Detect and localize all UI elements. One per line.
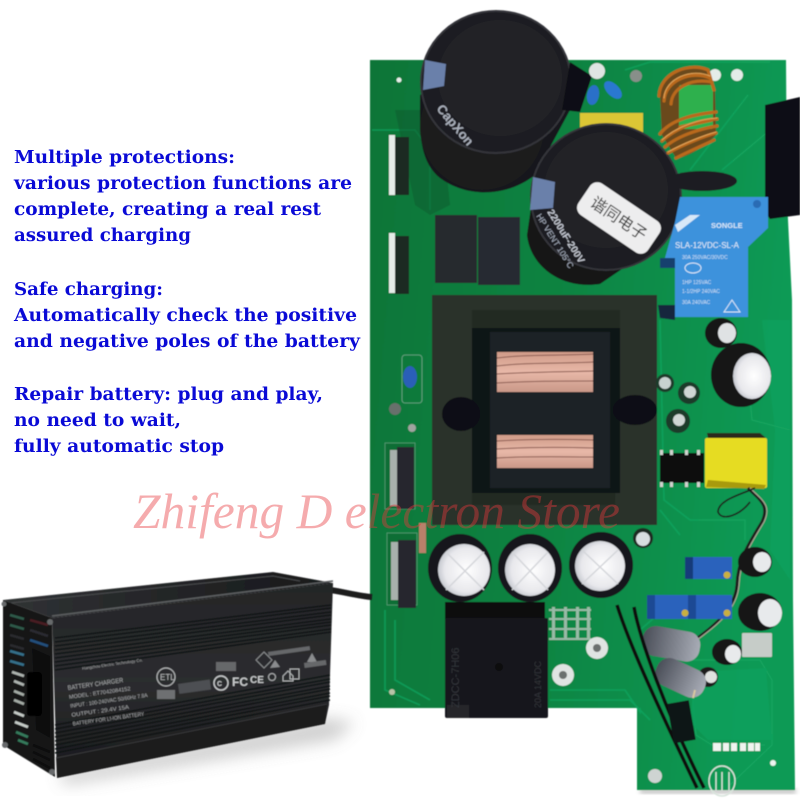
heading: repair battery: fully automatic stop — [14, 437, 224, 457]
copper pour — [690, 668, 772, 740]
capacitor top — [531, 124, 681, 270]
charger drop shadow — [58, 718, 355, 785]
copper winding lower — [497, 435, 593, 468]
relay brand: SONGLE — [711, 221, 743, 230]
ETL mark: ETL — [160, 673, 175, 682]
bottom right components — [667, 700, 760, 796]
capacitor body — [527, 130, 680, 285]
product title: BATTERY CHARGER — [67, 677, 124, 692]
black relay — [445, 602, 548, 718]
heading: safe charging: Safe charging: — [14, 280, 163, 300]
output: OUTPUT : 29.4V 15A — [71, 705, 130, 719]
heading: safe charging: and negative poles of the battery — [14, 332, 361, 352]
watermark: store name: Zhifeng D electron Store — [133, 483, 620, 539]
large capacitor: 2200uF 200V — [527, 124, 681, 285]
capacitor body — [420, 60, 570, 192]
label: CapXon: CapXon — [434, 101, 477, 149]
charger end panel — [3, 600, 55, 777]
heading: multiple protections: assured charging — [14, 226, 191, 246]
power cable — [330, 590, 372, 597]
relay ratings: 30A 240VAC — [682, 300, 711, 306]
blue trimmers — [647, 557, 732, 619]
SMD cluster — [549, 607, 591, 640]
battery type: BATTERY FOR LI-ION BATTERY — [72, 712, 145, 728]
IEC power socket — [32, 648, 50, 738]
heading: safe charging: Automatically check the positive — [13, 306, 357, 326]
mounting screws — [389, 637, 776, 783]
brand line: Hangzhou Electric Technology Co. — [82, 657, 143, 671]
yellow auxiliary transformer — [705, 433, 767, 489]
certification marks: CE — [250, 675, 264, 686]
right side capacitors — [656, 318, 771, 433]
upper cooling ribs — [55, 605, 331, 670]
charger bottom skirt — [56, 703, 327, 778]
black output wires — [617, 605, 704, 788]
pair of MOSFET heat tabs, top left — [389, 135, 409, 294]
white label — [574, 179, 664, 257]
relay ratings — [682, 255, 728, 306]
large capacitor: CapXon — [420, 11, 592, 192]
white connector — [742, 633, 772, 657]
relay ratings: 1HP 125VAC — [682, 280, 712, 286]
heading: multiple protections: various protection functions are — [13, 174, 352, 194]
capacitor top — [421, 11, 571, 153]
text block: product benefits — [13, 148, 361, 457]
input: INPUT : 100-240VAC 50/60Hz 7.8A — [70, 693, 148, 710]
voltage rating text: 2200uF-200V — [544, 208, 586, 266]
small blue capacitors — [396, 63, 743, 106]
heading: multiple protections: complete, creating a real rest — [14, 200, 321, 220]
heading: repair battery — [14, 385, 323, 457]
vent spec text: HP VENT 105°C — [534, 212, 576, 270]
heading: safe charging — [13, 280, 361, 352]
heading: repair battery: Repair battery: plug and play, — [14, 385, 323, 405]
vent tab — [530, 177, 555, 210]
relay print: ZDCC-7H06 — [450, 647, 462, 708]
copper traces — [372, 62, 790, 785]
blue relay — [658, 197, 768, 320]
small lower right capacitors — [698, 547, 782, 687]
heading: multiple protections — [13, 148, 352, 246]
yellow film capacitor — [580, 113, 643, 133]
charger long face — [52, 583, 333, 778]
toroid inductor — [659, 66, 717, 158]
charger top face — [3, 572, 333, 618]
certification marks: FC — [232, 675, 248, 689]
black capacitor foot — [667, 171, 737, 191]
relay ratings: 30A 250VAC/30VDC — [682, 255, 728, 261]
heading: multiple protections: Multiple protections: — [14, 148, 235, 168]
white label: 谐同电子 — [587, 193, 650, 244]
grey transformer leads — [695, 488, 767, 640]
lower left MOSFETs — [385, 443, 426, 608]
X2 box capacitors — [435, 215, 520, 285]
panel: battery charger photo — [2, 572, 372, 785]
relay ratings: 1-1/2HP 240VAC — [682, 289, 720, 295]
lower cooling ribs — [55, 675, 330, 753]
black fan connector — [765, 97, 800, 219]
switching IC — [660, 450, 704, 487]
relay model: SLA-12VDC-SL-A — [675, 241, 740, 250]
certification marks — [178, 646, 326, 694]
vent tab — [423, 60, 446, 90]
corner screws — [2, 602, 55, 775]
board shadow — [640, 788, 796, 794]
panel: circuit board photo — [370, 11, 800, 796]
bottom electrolytic capacitors — [428, 528, 653, 602]
PCB substrate — [370, 60, 795, 790]
certification marks: C — [217, 681, 222, 688]
ventilation slots — [10, 615, 50, 768]
epoxy blobs — [442, 397, 480, 431]
model: MODEL : ET7042084152 — [69, 686, 131, 701]
small blue capacitor, left — [389, 355, 422, 432]
high frequency transformer — [432, 295, 657, 525]
ETL mark — [157, 668, 175, 699]
relay rating: 20A 14VDC — [533, 660, 543, 708]
rating label — [65, 657, 151, 728]
copper winding upper — [497, 352, 593, 392]
heading: repair battery: no need to wait, — [14, 411, 181, 431]
grey power resistors — [640, 624, 710, 702]
